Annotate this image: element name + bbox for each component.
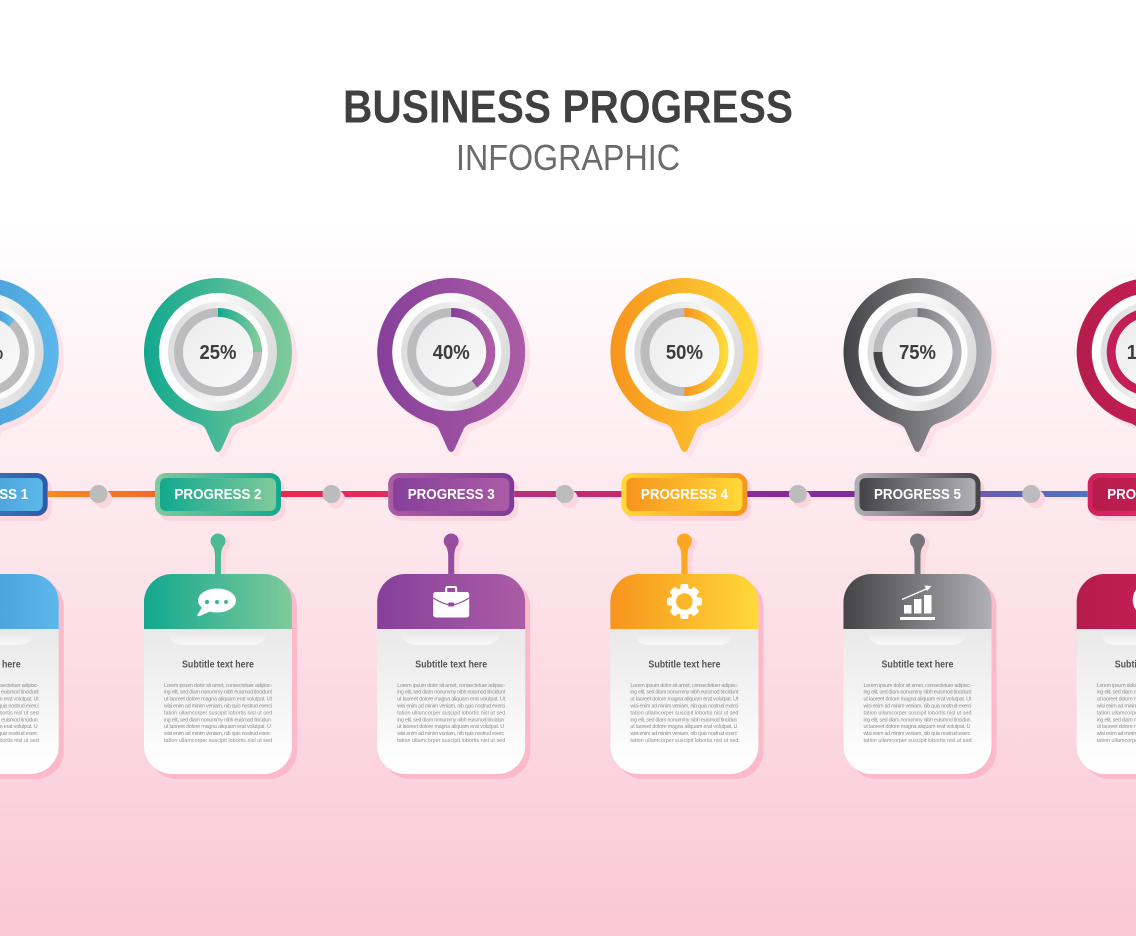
card 5 (844, 574, 996, 779)
card 2 text: tation ullamcorper suscipit lobortis nisl ut sed (164, 710, 272, 716)
label 5 (854, 473, 984, 521)
card 5 text: ing elit, sed diam nonummy nibh euismod tincidun (864, 717, 971, 723)
pin 2: 25% (200, 342, 237, 364)
card 2 text: Lorem ipsum dolor sit amet, consectetuer adipisc- (164, 683, 272, 689)
card 3 text (396, 683, 506, 744)
card 5 text: wisi enim ad minim veniam, nib quis nostrud exerc (862, 731, 971, 737)
card 6 text (1096, 683, 1136, 744)
subtitle: INFOGRAPHIC (456, 137, 680, 178)
card 3 text: tation ullamcorper suscipit lobortis nisl ut sed (397, 710, 505, 716)
card 3: Subtitle text here (415, 660, 488, 670)
pin 5: 75% (899, 342, 936, 364)
label 5: PROGRESS 5 (874, 487, 961, 503)
icon: briefcase (433, 587, 469, 618)
label 4 (621, 473, 751, 521)
connector 4 (677, 534, 697, 575)
card 5 text: ing elit, sed diam nonummy nibh euismod tincidunt (864, 690, 972, 696)
icon: circle (1133, 582, 1136, 618)
label 2: PROGRESS 2 (174, 487, 262, 503)
card 2 text: ut laoreet dolore magna aliquam erat volutpat. U (164, 724, 271, 730)
card 2 text (163, 683, 272, 744)
icon: growth chart (900, 586, 935, 620)
card 3 text: ing elit, sed diam nonummy nibh euismod tincidunt (397, 690, 506, 696)
step 4: progress 4 (610, 278, 763, 779)
pin 2 (144, 278, 297, 457)
card 3 text: ing elit, sed diam nonummy nibh euismod tincidun (397, 717, 504, 723)
card 3 text: ut laoreet dolore magna aliquam erat volutpat. U (397, 724, 504, 730)
card 2 (144, 574, 297, 779)
pin 1 (0, 278, 64, 457)
card 4 text: Lorem ipsum dolor sit amet, consectetuer adipisc- (630, 683, 739, 689)
pin 3: 40% (433, 342, 470, 364)
card 4 text: ut laoreet dolore magna aliquam erat volutpat. U (630, 724, 737, 730)
timeline line (48, 491, 1088, 500)
label 3: PROGRESS 3 (408, 487, 495, 503)
card 2 text: wisi enim ad minim veniam, nib quis nostrud exerc (163, 731, 271, 737)
label 4: PROGRESS 4 (641, 487, 728, 503)
timeline dots (90, 485, 1045, 508)
card 2 text: ing elit, sed diam nonummy nibh euismod tincidunt (164, 690, 272, 696)
card 1 text (0, 683, 39, 744)
card 3 text: ut laoreet dolore magna aliquam erat volutpat. Ut (397, 697, 506, 703)
label 1 (0, 473, 52, 521)
connector 2 (210, 534, 230, 575)
card 2 text: wisi enim ad minim veniam, nib quis nostrud exerci (163, 704, 272, 710)
card 2 text: ut laoreet dolore magna aliquam erat volutpat. Ut (164, 697, 272, 703)
pin 3 (377, 278, 530, 457)
card 2: Subtitle text here (182, 660, 254, 670)
card 5: Subtitle text here (882, 660, 954, 670)
card 3 text: Lorem ipsum dolor sit amet, consectetuer adipisc- (397, 683, 505, 689)
step 5: progress 5 (844, 278, 996, 779)
card 1 (0, 574, 64, 779)
card 5 text: tation ullamcorper suscipit lobortis nisl ut sed (864, 710, 972, 716)
card 4: Subtitle text here (648, 660, 721, 670)
card 4 text: wisi enim ad minim veniam, nib quis nostrud exerc (629, 731, 738, 737)
card 5 text: ut laoreet dolore magna aliquam erat volutpat. Ut (864, 697, 972, 703)
icon: chat bubble (197, 588, 236, 616)
card 2 text: ing elit, sed diam nonummy nibh euismod tincidun (164, 717, 271, 723)
step 3: progress 3 (377, 278, 530, 779)
card 4 (610, 574, 763, 779)
card 3 (377, 574, 530, 779)
icon: gear (667, 584, 702, 619)
card 5 text: Lorem ipsum dolor sit amet, consectetuer adipisc- (864, 683, 972, 689)
card 6 (1077, 574, 1136, 779)
card 4 text: tation ullamcorper suscipit lobortis nisl ut sed (630, 710, 738, 716)
card 5 text (862, 683, 972, 744)
pin 4 (610, 278, 763, 457)
card 5 text: wisi enim ad minim veniam, nib quis nostrud exerci (862, 704, 972, 710)
label 3 (388, 473, 518, 521)
label 6 (1088, 473, 1136, 521)
card 5 text: ut laoreet dolore magna aliquam erat volutpat. U (864, 724, 971, 730)
card 2 text: tation ullamcorper suscipit lobortis nisl ut sed (164, 738, 272, 744)
step 1: progress 1 (0, 278, 64, 779)
step 2: progress 2 (144, 278, 297, 779)
card 3 text: wisi enim ad minim veniam, nib quis nostrud exerci (396, 704, 505, 710)
card 3 text: tation ullamcorper suscipit lobortis nisl ut sed (397, 738, 505, 744)
connector 5 (910, 534, 930, 575)
card 4 text: ut laoreet dolore magna aliquam erat volutpat. Ut (630, 697, 739, 703)
pin 4: 50% (666, 342, 703, 364)
pin 6 (1077, 278, 1136, 457)
title: BUSINESS PROGRESS (343, 80, 793, 132)
card 4 text (629, 683, 739, 744)
connector 3 (444, 534, 464, 575)
card 3 text: wisi enim ad minim veniam, nib quis nostrud exerc (396, 731, 504, 737)
step 6: progress 6 (1077, 278, 1136, 779)
card 4 text: ing elit, sed diam nonummy nibh euismod tincidunt (630, 690, 739, 696)
card 4 text: wisi enim ad minim veniam, nib quis nostrud exerci (629, 704, 738, 710)
pin 5 (844, 278, 996, 457)
card 4 text: tation ullamcorper suscipit lobortis nisl ut sed (630, 738, 738, 744)
card 4 text: ing elit, sed diam nonummy nibh euismod tincidun (630, 717, 737, 723)
label 2 (155, 473, 285, 521)
card 5 text: tation ullamcorper suscipit lobortis nisl ut sed (864, 738, 972, 744)
